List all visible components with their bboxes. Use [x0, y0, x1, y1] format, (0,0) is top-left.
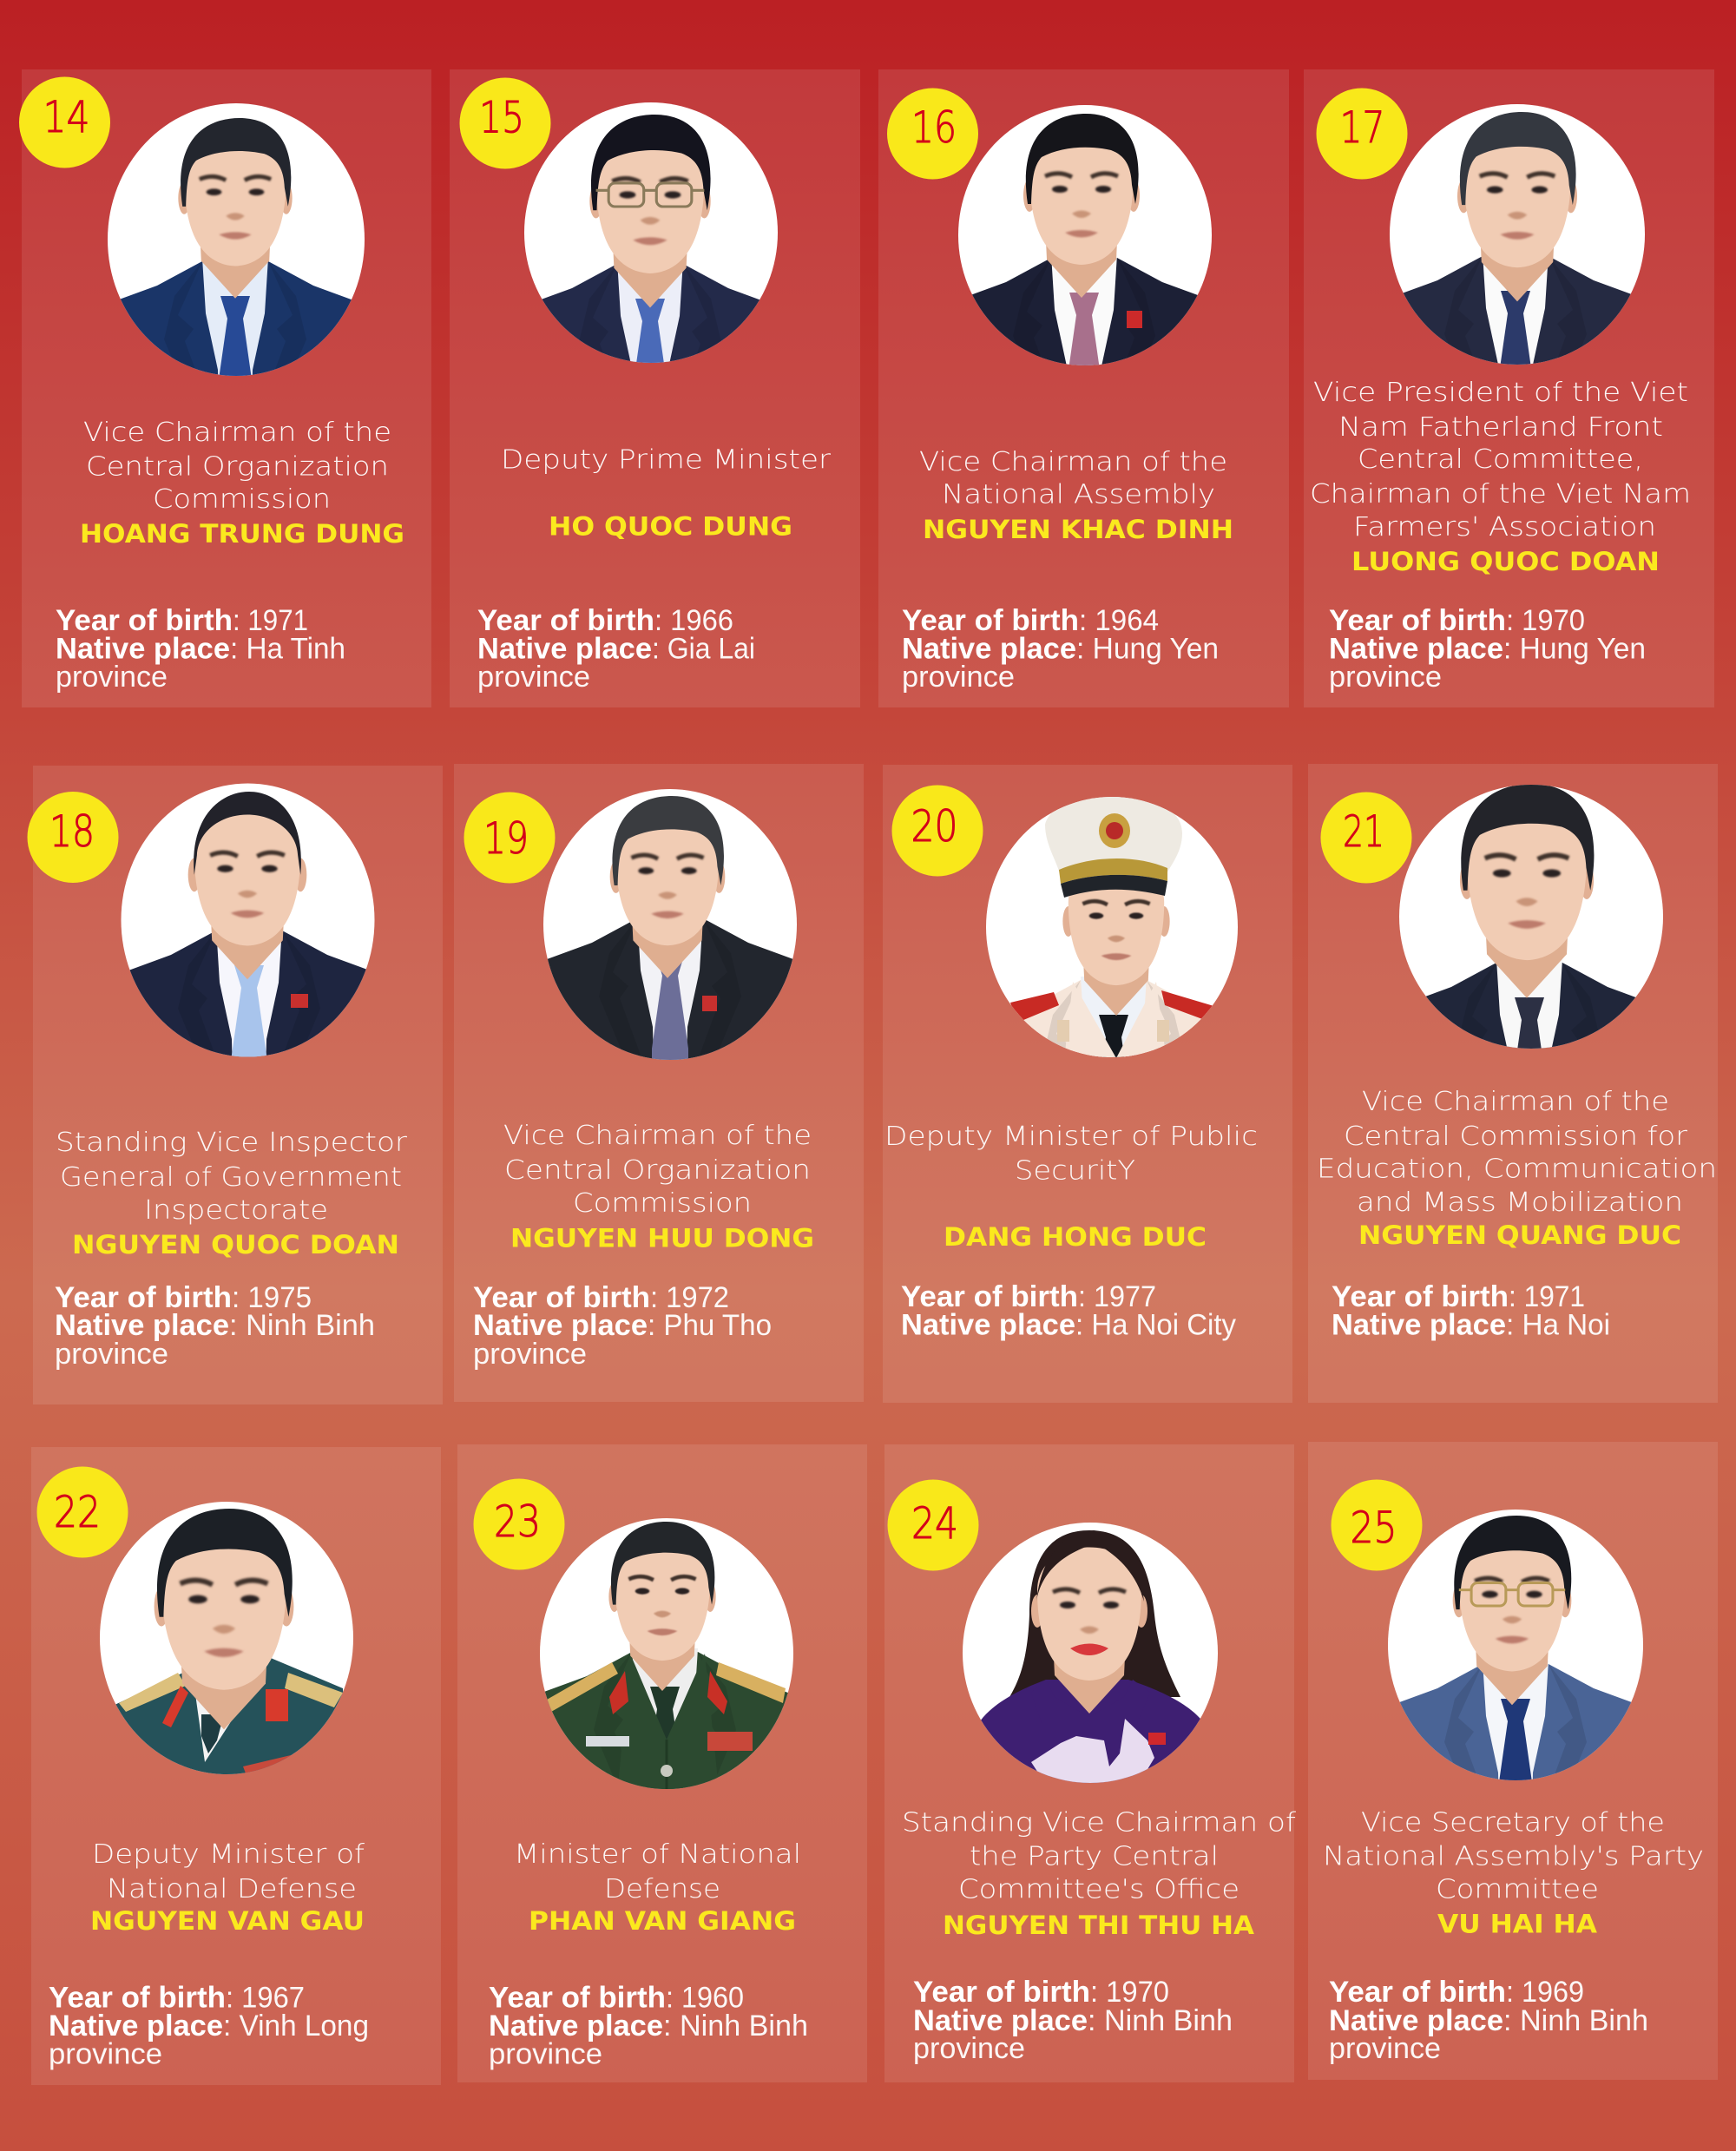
details 15: province [477, 661, 590, 694]
details 14: : 1971 [233, 604, 308, 637]
details 19: Year of birth [473, 1281, 650, 1314]
details 19: : 1972 [650, 1281, 729, 1314]
details 23: Native place [489, 2010, 663, 2042]
details 17: province [1329, 661, 1442, 694]
details 17: : Hung Yen [1503, 632, 1646, 665]
card 23: Phan Van Giang [457, 1444, 867, 2082]
details 16 [902, 604, 1219, 694]
badge 24 [887, 1479, 979, 1571]
portrait 19 [543, 789, 797, 1060]
details 16: province [902, 661, 1015, 694]
role 17: Nam Fatherland Front [1338, 412, 1663, 443]
card 20: Dang Hong Duc [883, 765, 1292, 1403]
badge 23: 23 [494, 1496, 541, 1547]
role 22 [92, 1839, 365, 1904]
portrait 20 [986, 797, 1238, 1057]
badge 25 [1332, 1479, 1422, 1571]
role 17: Vice President of the Viet [1313, 378, 1688, 408]
role 19 [503, 1121, 812, 1219]
name 21: NGUYEN QUANG DUC [1358, 1220, 1681, 1250]
role 24: Committee's Office [958, 1875, 1240, 1904]
details 18: Native place [55, 1309, 229, 1342]
card 15: Ho Quoc Dung [450, 69, 860, 707]
badge 17: 17 [1340, 102, 1385, 153]
role 21: Education, Communication [1317, 1154, 1717, 1184]
role 20 [884, 1122, 1258, 1186]
role 25: Committee [1436, 1875, 1599, 1904]
details 19 [473, 1281, 772, 1371]
role 17: Farmers' Association [1353, 512, 1656, 543]
role 23: Defense [604, 1874, 720, 1904]
details 24: Year of birth [913, 1976, 1090, 2009]
card 24: Nguyen Thi Thu Ha [884, 1444, 1296, 2082]
role 19: Central Organization [504, 1155, 811, 1186]
badge 22 [36, 1467, 128, 1557]
role 20: Deputy Minister of Public [884, 1122, 1258, 1152]
details 17: : 1970 [1506, 604, 1585, 637]
badge 18: 18 [49, 806, 95, 857]
role 25: Vice Secretary of the [1361, 1807, 1665, 1839]
role 16: National Assembly [942, 479, 1215, 510]
details 15 [477, 604, 755, 694]
details 14 [56, 604, 345, 694]
role 21 [1317, 1087, 1717, 1218]
details 23 [489, 1981, 808, 2071]
details 20 [901, 1280, 1236, 1342]
details 25: Native place [1329, 2004, 1503, 2037]
details 20: Year of birth [901, 1280, 1078, 1313]
details 21: : Ha Noi [1506, 1309, 1610, 1342]
name 22: NGUYEN VAN GAU [90, 1906, 365, 1936]
portrait 16 [958, 105, 1212, 365]
badge 21 [1321, 792, 1411, 884]
details 20: : Ha Noi City [1075, 1309, 1236, 1342]
name 18: NGUYEN QUOC DOAN [72, 1230, 399, 1260]
badge 18 [28, 792, 118, 883]
role 14: Vice Chairman of the [83, 418, 391, 448]
details 24: : 1970 [1090, 1976, 1169, 2009]
badge 15: 15 [479, 92, 524, 142]
card 25: Vu Hai Ha [1308, 1442, 1718, 2080]
card 17: Luong Quoc Doan [1304, 69, 1714, 707]
details 16: : Hung Yen [1076, 632, 1219, 665]
details 14: : Ha Tinh [230, 632, 345, 665]
details 24: : Ninh Binh [1088, 2004, 1233, 2037]
details 19: Native place [473, 1309, 648, 1342]
details 22: Year of birth [49, 1981, 226, 2014]
details 16: Year of birth [902, 604, 1079, 637]
details 15: : Gia Lai [652, 632, 755, 665]
name 23: PHAN VAN GIANG [529, 1906, 796, 1936]
role 17: Chairman of the Viet Nam [1310, 479, 1691, 510]
role 23 [514, 1839, 801, 1904]
portrait 21 [1399, 785, 1663, 1049]
role 25: National Assembly's Party [1323, 1842, 1704, 1871]
role 18 [56, 1128, 408, 1226]
details 16: Native place [902, 632, 1076, 665]
details 19: province [473, 1338, 587, 1371]
details 24: Native place [913, 2004, 1088, 2037]
details 17 [1329, 604, 1646, 694]
name 17: LUONG QUOC DOAN [1351, 547, 1660, 576]
details 22: province [49, 2038, 162, 2071]
badge 20: 20 [911, 801, 958, 852]
role 16: Vice Chairman of the [919, 447, 1227, 477]
role 18: General of Government [60, 1162, 402, 1193]
details 25: province [1329, 2032, 1441, 2065]
details 15: Year of birth [477, 604, 654, 637]
role 22: National Defense [107, 1874, 357, 1904]
details 18 [55, 1281, 375, 1371]
name 20: DANG HONG DUC [944, 1222, 1207, 1252]
details 21: Year of birth [1332, 1280, 1509, 1313]
card 16: Nguyen Khac Dinh [878, 69, 1289, 707]
details 23: province [489, 2038, 602, 2071]
role 14: Commission [153, 484, 331, 515]
portrait 14 [108, 103, 365, 376]
portrait 22 [97, 1498, 356, 1788]
details 22 [49, 1981, 369, 2071]
details 25: : Ninh Binh [1503, 2004, 1648, 2037]
details 22: : Vinh Long [223, 2010, 369, 2042]
name 16: NGUYEN KHAC DINH [923, 515, 1233, 544]
details 21 [1332, 1280, 1610, 1342]
role 17 [1310, 378, 1691, 543]
role 25 [1323, 1807, 1704, 1904]
portrait 25 [1388, 1510, 1643, 1780]
role 20: SecuritY [1015, 1156, 1135, 1186]
details 21: : 1971 [1509, 1280, 1585, 1313]
name 25: VU HAI HA [1437, 1910, 1598, 1939]
details 17: Native place [1329, 632, 1503, 665]
role 22: Deputy Minister of [92, 1839, 365, 1870]
details 15: : 1966 [654, 604, 733, 637]
details 25: Year of birth [1329, 1976, 1506, 2009]
role 19: Vice Chairman of the [503, 1121, 812, 1151]
role 24: the Party Central [970, 1842, 1219, 1871]
role 24: Standing Vice Chairman of [902, 1807, 1296, 1839]
details 18: province [55, 1338, 168, 1371]
details 24 [913, 1976, 1233, 2065]
card 21: Nguyen Quang Duc [1308, 764, 1718, 1403]
details 20: : 1977 [1078, 1280, 1156, 1313]
details 14: Native place [56, 632, 230, 665]
card 14: Hoang Trung Dung [19, 69, 431, 707]
role 15: Deputy Prime Minister [501, 444, 832, 476]
role 14 [83, 418, 391, 515]
badge 24: 24 [911, 1498, 958, 1549]
role 21: Central Commission for [1344, 1122, 1688, 1152]
details 18: : 1975 [232, 1281, 312, 1314]
card 18: Nguyen Quoc Doan [28, 766, 443, 1404]
details 19: : Phu Tho [648, 1309, 772, 1342]
badge 19: 19 [483, 813, 529, 864]
role 21: Vice Chairman of the [1362, 1087, 1669, 1117]
portrait 15 [524, 102, 778, 363]
details 15: Native place [477, 632, 652, 665]
details 22: Native place [49, 2010, 223, 2042]
details 20: Native place [901, 1309, 1075, 1342]
name 14: HOANG TRUNG DUNG [80, 519, 404, 549]
details 14: Year of birth [56, 604, 233, 637]
card 22: Nguyen Van Gau [31, 1447, 441, 2085]
details 25 [1329, 1976, 1648, 2065]
role 21: and Mass Mobilization [1357, 1187, 1683, 1218]
role 17: Central Committee, [1358, 444, 1643, 475]
portrait 17 [1390, 104, 1645, 365]
name 15: HO QUOC DUNG [549, 512, 792, 542]
portrait 18 [122, 783, 375, 1057]
badge 19 [464, 792, 556, 884]
details 23: Year of birth [489, 1981, 666, 2014]
badge 17 [1316, 89, 1408, 179]
details 18: Year of birth [55, 1281, 232, 1314]
details 23: : Ninh Binh [663, 2010, 808, 2042]
details 16: : 1964 [1079, 604, 1159, 637]
badge 16 [887, 89, 978, 179]
role 23: Minister of National [514, 1839, 801, 1870]
badge 23 [474, 1479, 564, 1569]
details 25: : 1969 [1506, 1976, 1584, 2009]
badge 15 [460, 78, 550, 168]
card 19: Nguyen Huu Dong [454, 764, 864, 1402]
details 23: : 1960 [666, 1981, 744, 2014]
details 21: Native place [1332, 1309, 1506, 1342]
role 14: Central Organization [86, 451, 389, 483]
details 17: Year of birth [1329, 604, 1506, 637]
details 14: province [56, 661, 168, 694]
details 22: : 1967 [226, 1981, 305, 2014]
badge 14: 14 [43, 92, 90, 142]
role 19: Commission [573, 1188, 752, 1219]
portrait 23 [540, 1518, 793, 1789]
name 19: NGUYEN HUU DONG [510, 1224, 814, 1253]
name 24: NGUYEN THI THU HA [943, 1911, 1255, 1940]
details 18: : Ninh Binh [229, 1309, 375, 1342]
role 18: Inspectorate [144, 1195, 328, 1226]
badge 21: 21 [1343, 806, 1384, 857]
portrait 24 [963, 1523, 1218, 1783]
badge 14 [19, 76, 110, 168]
details 24: province [913, 2032, 1025, 2065]
role 24 [902, 1807, 1296, 1904]
role 16 [919, 447, 1227, 510]
role 18: Standing Vice Inspector [56, 1128, 408, 1158]
badge 20 [892, 785, 983, 877]
badge 16: 16 [911, 102, 957, 153]
badge 25: 25 [1351, 1503, 1397, 1553]
badge 22: 22 [54, 1487, 101, 1537]
